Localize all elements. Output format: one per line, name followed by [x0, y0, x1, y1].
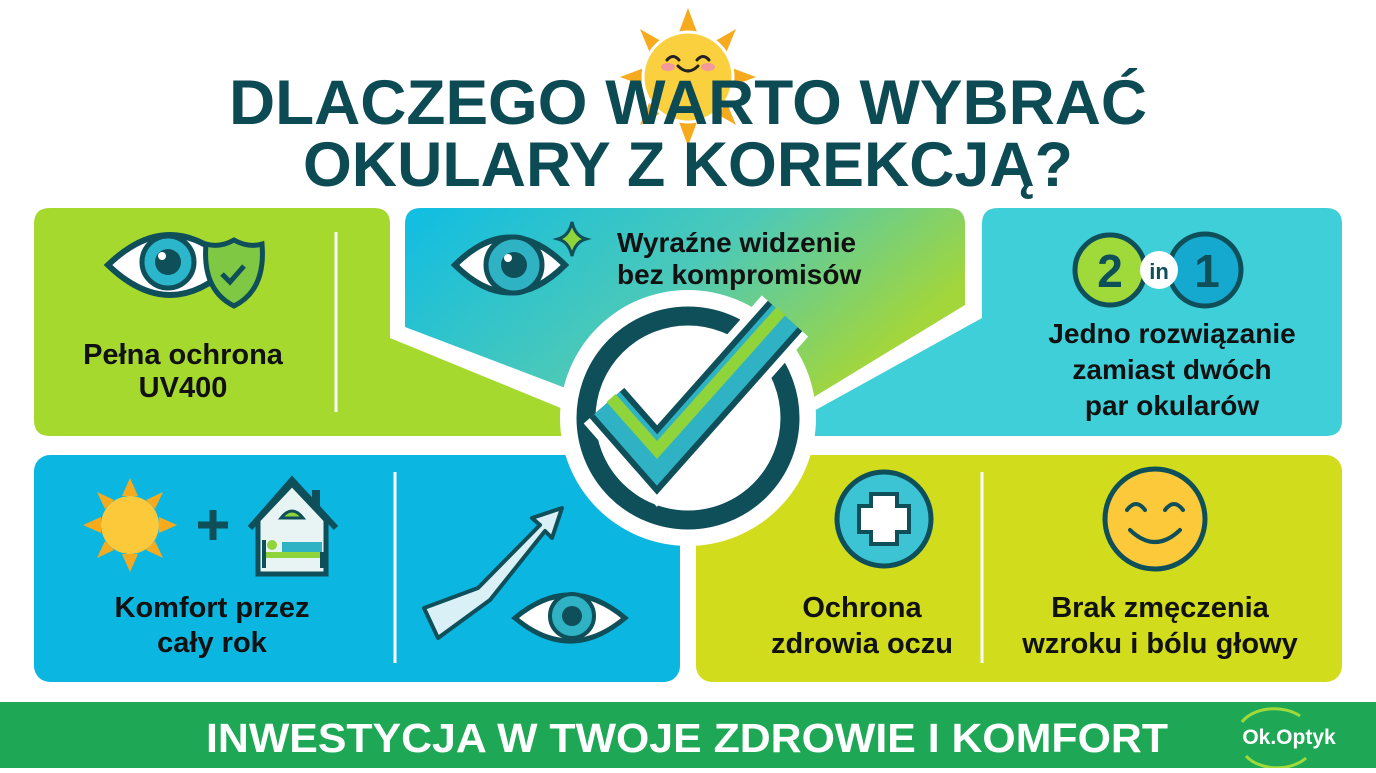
text: pelna ochrona: UV400 — [139, 372, 227, 404]
sun: top — [620, 8, 756, 146]
text: wyrazne widzenie: bez kompromisów — [617, 259, 861, 290]
icon: 2 in 1: in — [1149, 259, 1169, 284]
icon: arrow with eye — [424, 508, 625, 641]
text: ochrona zdrowia oczu: zdrowia oczu — [771, 628, 953, 660]
text: komfort: cały rok — [157, 627, 268, 659]
panel: pelna ochrona UV400 — [34, 208, 590, 436]
footer banner — [0, 702, 1376, 768]
text: brak zmeczenia: wzroku i bólu głowy — [1021, 628, 1298, 660]
logo: Ok.Optyk — [1242, 726, 1336, 749]
text: brak zmeczenia — [1021, 592, 1298, 660]
text: jedno rozwiazanie: zamiast dwóch — [1072, 354, 1272, 385]
icon: medical cross — [837, 472, 931, 566]
text: pelna ochrona — [83, 339, 284, 404]
icon: 2 in 1: 1 — [1194, 245, 1220, 297]
icon: eye with sparkle — [455, 222, 586, 293]
panel: ochrona zdrowia / brak zmeczenia — [696, 455, 1342, 682]
icon: center check circle — [560, 290, 816, 546]
text: wyrazne widzenie: Wyraźne widzenie — [617, 227, 856, 258]
text: brak zmeczenia: Brak zmęczenia — [1051, 592, 1270, 624]
icon: eye with shield — [108, 235, 262, 306]
text: jedno rozwiazanie — [1048, 318, 1296, 421]
text: pelna ochrona: Pełna ochrona — [83, 339, 284, 371]
text: komfort — [115, 592, 309, 659]
text: komfort: Komfort przez — [115, 592, 309, 624]
text: ochrona zdrowia oczu — [771, 592, 953, 660]
text: ochrona zdrowia oczu: Ochrona — [802, 592, 922, 624]
text: jedno rozwiazanie: par okularów — [1085, 390, 1259, 421]
title: OKULARY Z KOREKCJĄ? — [303, 130, 1073, 200]
title — [229, 68, 1147, 200]
panel: wyrazne widzenie — [405, 208, 965, 400]
logo — [1242, 709, 1336, 768]
title: DLACZEGO WARTO WYBRAĆ — [229, 68, 1147, 138]
text: wyrazne widzenie — [617, 227, 861, 290]
panel: 2 in 1 — [812, 208, 1342, 436]
panel: komfort przez caly rok — [34, 455, 680, 682]
text: jedno rozwiazanie: Jedno rozwiązanie — [1048, 318, 1296, 349]
footer banner: INWESTYCJA W TWOJE ZDROWIE I KOMFORT — [206, 715, 1168, 761]
icon: 2 in 1: 2 — [1097, 245, 1123, 297]
icon: sun plus house — [83, 478, 336, 574]
icon: smiley — [1105, 469, 1205, 569]
icon: 2 in 1 — [1075, 234, 1241, 306]
